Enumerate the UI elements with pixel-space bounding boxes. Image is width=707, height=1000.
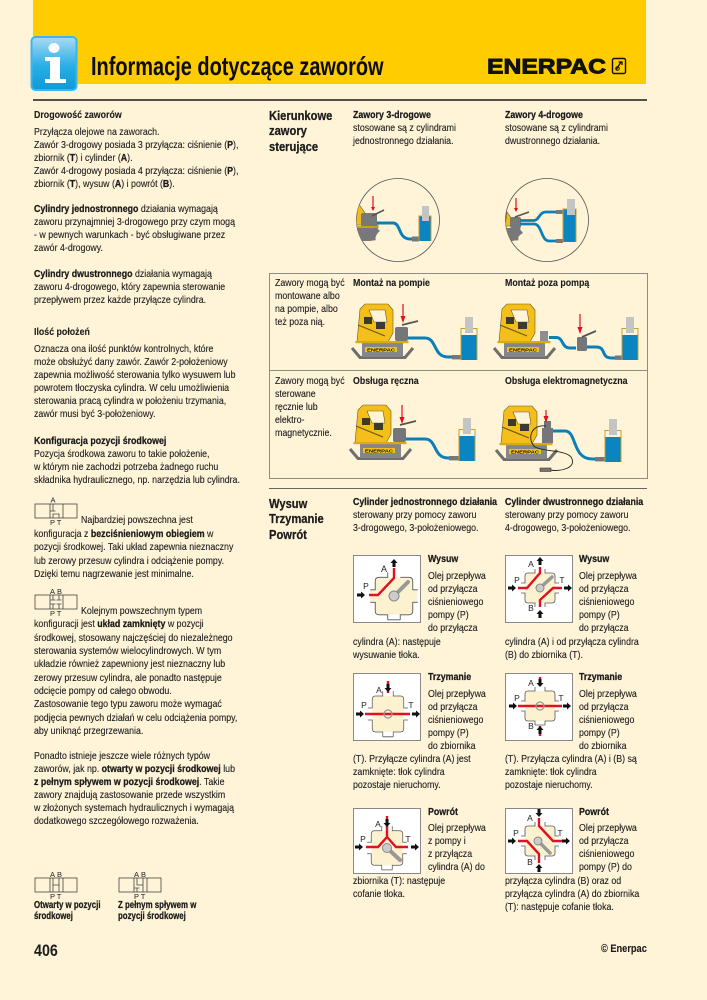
panel divider (269, 370, 647, 371)
left column text: ports (34, 126, 238, 190)
left column text: positions heading: Ilość położeń (34, 326, 90, 338)
text: 4-way valves (505, 109, 608, 147)
diagram: 3-way hold: T (408, 700, 414, 710)
text: 3-way retract continuation: zbiornika (T): następuje (353, 875, 445, 887)
left column text: closed center: Zastosowanie tego typu zaworu może wymagać (34, 698, 222, 710)
text: 4-way retract continuation: przyłącza cylindra (B) oraz od (505, 875, 621, 887)
text: 4-way retract body: Olej przepływa (579, 822, 637, 834)
text: 3-way valves: Zawory 3-drogowe (353, 109, 431, 121)
text: 4-way extend body: ciśnieniowego (579, 596, 634, 608)
text: 3-way hold body: Olej przepływa (428, 688, 486, 700)
heading: solenoid operation: Obsługa elektromagnetyczna (505, 375, 628, 387)
diagram: 4-way hold: B (528, 721, 534, 731)
text: 4-way extend continuation: cylindra (A) i od przyłącza cylindra (505, 636, 639, 648)
text: operation note: sterowane (275, 388, 316, 400)
symbol: float center: P (134, 892, 139, 901)
text: 3-way extend body: pompy (P) (428, 609, 469, 621)
left column text: single-acting cylinders: Cylindry jednostronnego działania wymagają (34, 203, 218, 215)
text: 3-way hold body (428, 688, 486, 752)
left column text: closed center: aby uniknąć przegrzewania. (34, 725, 143, 737)
text: 3-way extend body: od przyłącza (428, 583, 478, 595)
text: 3-way hold continuation (353, 753, 471, 791)
symbol: float center: B (141, 870, 146, 879)
text: operation note: magnetycznie. (275, 427, 332, 439)
diagram: 4-way hold: P (514, 693, 520, 703)
section rule (269, 488, 647, 489)
text: operation note (275, 375, 345, 439)
left column text: double-acting cylinders: zaworu 4-drogowego, który zapewnia sterowanie (34, 281, 225, 293)
text: 4-way extend body: od przyłącza (579, 583, 629, 595)
left column text: other valves: zaworów, jak np. otwarty w pozycji środkowej lub (34, 763, 235, 775)
diagram: 4-way extend: B (528, 603, 534, 613)
left column text: closed center: odcięcie pompy od całego obwodu. (34, 685, 172, 697)
heading: manual operation: Obsługa ręczna (353, 375, 419, 387)
symbol: tandem center: T (57, 518, 62, 527)
caption: open center: środkowej (34, 910, 73, 922)
text: single-acting cylinder: 3-drogowego, 3-położeniowego. (353, 522, 479, 534)
text: 3-way hold body: do zbiornika (428, 740, 476, 752)
symbol: closed center: T (57, 609, 62, 618)
caption: float center (118, 898, 196, 922)
logo: Enerpac: ENERPAC (487, 54, 606, 78)
text: double-acting cylinder: sterowany przy pomocy zaworu (505, 509, 629, 521)
text: 3-way retract: Powrót (428, 806, 458, 818)
diagram: 4-way extend: T (559, 575, 565, 585)
illustration: pump mounted valve: ENERPAC (367, 347, 396, 352)
text: 4-way extend body: pompy (P) (579, 609, 620, 621)
heading: extend hold retract (268, 496, 324, 542)
illustration: pump mounted valve (352, 304, 477, 360)
text: 4-way retract body: ciśnieniowego (579, 848, 634, 860)
illustration: solenoid valve (496, 406, 621, 472)
diagram: 4-way hold: A (528, 678, 534, 688)
left column text: closed center: podjęcia pewnych działań w celu odciążenia pompy, (34, 712, 237, 724)
text: 4-way hold body: do zbiornika (579, 740, 627, 752)
left column text: other valves: z pełnym spływem w pozycji środkowej. Takie (34, 776, 225, 788)
left column text: center configuration (34, 435, 240, 486)
left column text: tandem center (34, 514, 234, 580)
text: operation note: Zawory mogą być (275, 375, 345, 387)
left column text: other valves: zawory znajdują zastosowanie przede wszystkim (34, 789, 225, 801)
diagram: 3-way hold (354, 674, 420, 740)
text: 3-way extend body (428, 570, 486, 634)
text: single-acting cylinder: Cylinder jednostronnego działania (353, 496, 497, 508)
text: 3-way valves (352, 109, 456, 147)
text: 3-way extend continuation: cylindra (A): następuje (353, 636, 441, 648)
text: operation note: ręcznie lub (275, 401, 318, 413)
left column text: tandem center: lub zerowy przesuw cylindra i odciążenie pompy. (34, 554, 224, 566)
text: 3-way extend: Wysuw (428, 553, 458, 565)
left column text: center configuration: Pozycja środkowa zaworu to takie położenie, (34, 448, 210, 460)
header band (33, 0, 646, 84)
text: 4-way valves: stosowane są z cylindrami (505, 122, 608, 134)
left column text: double-acting cylinders: Cylindry dwustronnego działania wymagają (34, 268, 212, 280)
text: 4-way extend: Wysuw (579, 553, 609, 565)
left column text: center configuration: w którym nie zachodzi potrzeba żadnego ruchu (34, 461, 218, 473)
text: 3-way retract body (428, 822, 486, 873)
text: 4-way hold continuation: pozostaje nieruchomy. (505, 779, 593, 791)
text: 4-way hold continuation: (T). Przyłącza cylindra (A) i (B) są (505, 753, 637, 765)
left column text: positions: zapewnia możliwość sterowania tylko wysuwem lub (34, 369, 235, 381)
diagram: 4-way retract: P (513, 828, 519, 838)
heading: extend hold retract: Powrót (269, 527, 307, 542)
text: 3-way hold body: pompy (P) (428, 727, 469, 739)
text: 4-way hold: Trzymanie (579, 671, 622, 683)
left column text: closed center: Kolejnym powszechnym typem (81, 605, 202, 617)
left column text: single-acting cylinders: zawór 4-drogowy. (34, 242, 103, 254)
diagram: 4-way retract: T (557, 828, 563, 838)
text: mounting note: też poza nią. (275, 316, 325, 328)
text: 3-way retract body: Olej przepływa (428, 822, 486, 834)
left column text: ports: Zawór 4-drogowy posiada 4 przyłącza: ciśnienie (P), (34, 165, 238, 177)
left column text: ports: zbiornik (T) i cylinder (A). (34, 152, 133, 164)
text: 3-way hold: Trzymanie (428, 671, 471, 683)
text: 4-way hold body: pompy (P) (579, 727, 620, 739)
diagram: 4-way extend (506, 556, 572, 622)
diagram: 3-way hold: A (376, 685, 382, 695)
text: 3-way hold continuation: (T). Przyłącze cylindra (A) jest (353, 753, 471, 765)
text: 3-way extend body: ciśnieniowego (428, 596, 483, 608)
illustration: 4-way valve detail (505, 178, 588, 262)
illustration: solenoid valve: ENERPAC (511, 449, 540, 454)
symbol: open center (35, 870, 77, 901)
left column text: center configuration: składnika hydraulicznego, np. narzędzia lub cylindra. (34, 474, 240, 486)
left column text: tandem center: Dzięki temu nagrzewanie jest minimalne. (34, 568, 194, 580)
text: double-acting cylinder: 4-drogowego, 3-położeniowego. (505, 522, 631, 534)
symbol: open center: T (57, 892, 62, 901)
page number: 406 (34, 941, 58, 960)
symbol: tandem center: A (50, 496, 56, 504)
left column text: ports: Zawór 3-drogowy posiada 3 przyłącza: ciśnienie (P), (34, 139, 238, 151)
caption: open center (34, 898, 101, 922)
text: mounting note: na pompie, albo (275, 303, 338, 315)
symbol: closed center: P (50, 609, 55, 618)
diagram: 3-way extend: P (363, 581, 369, 591)
illustration: manual valve (350, 405, 475, 461)
text: operation note: elektro- (275, 414, 304, 426)
heading: directional valves: Kierunkowe (269, 108, 332, 123)
symbol: tandem center (35, 496, 77, 527)
text: single-acting cylinder (353, 496, 498, 534)
text: mounting note: Zawory mogą być (275, 277, 345, 289)
left column text: flow capacity heading: Drogowość zaworów (34, 109, 122, 121)
caption: open center: Otwarty w pozycji (34, 898, 101, 910)
left column text: positions: Oznacza ona ilość punktów kontrolnych, które (34, 343, 213, 355)
header rule (33, 99, 647, 101)
symbol: closed center: B (57, 587, 62, 596)
text: 4-way extend continuation (505, 636, 639, 661)
left column text: closed center: sterowania systemów wielocylindrowych. W tym (34, 645, 221, 657)
left column text: ports: zbiornik (T), wysuw (A) i powrót (B). (34, 178, 175, 190)
left column text: other valves: Ponadto istnieje jeszcze wiele różnych typów (34, 750, 210, 762)
text: 4-way retract body: pompy (P) do (579, 861, 632, 873)
left column text: positions: może obsłużyć dany zawór. Zawór 2-położeniowy (34, 356, 228, 368)
heading: extend hold retract: Trzymanie (269, 511, 324, 526)
diagram: 4-way retract: A (527, 813, 533, 823)
text: single-acting cylinder: sterowany przy pomocy zaworu (353, 509, 477, 521)
symbol: float center: A (134, 870, 139, 879)
left column text: positions: sterowania pracą cylindra w położeniu trzymania, (34, 395, 226, 407)
left column text: closed center: konfiguracji jest układ zamknięty w pozycji (34, 618, 204, 630)
text: 3-way retract continuation (353, 875, 445, 900)
heading: directional valves: zawory (269, 123, 307, 138)
text: 4-way extend body: do przyłącza (579, 622, 629, 634)
left column text: double-acting cylinders (34, 268, 225, 306)
text: mounting note (275, 277, 345, 328)
diagram: 4-way hold (506, 674, 572, 740)
caption: float center: pozycji środkowej (118, 910, 186, 922)
text: 4-way retract body (579, 822, 637, 873)
heading: directional valves: sterujące (269, 139, 318, 154)
diagram: 3-way extend (354, 556, 420, 622)
diagram: 4-way extend: P (514, 575, 520, 585)
text: 4-way hold body (579, 688, 637, 752)
text: 3-way extend body: Olej przepływa (428, 570, 486, 582)
left column text: single-acting cylinders: zaworu przynajmniej 3-drogowego przy czym mogą (34, 216, 235, 228)
text: 3-way extend continuation (352, 636, 441, 661)
illustration: manual valve: ENERPAC (365, 448, 394, 453)
text: 4-way hold continuation: zamknięte: tłok cylindra (505, 766, 597, 778)
left column text: closed center: zerowy przesuw cylindra, ale ponadto następuje (34, 672, 222, 684)
symbol: tandem center: P (50, 518, 55, 527)
diagram: 3-way retract (354, 808, 420, 874)
illustration: remote mounted valve: ENERPAC (509, 347, 538, 352)
symbol: closed center (35, 587, 77, 618)
text: 3-way extend continuation: wysuwanie tłoka. (353, 649, 420, 661)
copyright: © Enerpac (601, 943, 647, 955)
panel: mounting and operation (269, 273, 648, 479)
diagram: 4-way hold: T (558, 693, 564, 703)
text: 3-way retract body: cylindra (A) do (428, 861, 485, 873)
text: 4-way retract continuation: przyłącza cylindra (A) do zbiornika (505, 888, 639, 900)
text: 4-way valves: dwustronnego działania. (505, 135, 600, 147)
diagram: 3-way hold: P (361, 700, 367, 710)
left column text: other valves: dodatkowego szczegółowego rozważenia. (34, 815, 199, 827)
left column text: single-acting cylinders (34, 203, 236, 254)
text: 4-way retract body: od przyłącza (579, 835, 629, 847)
text: 3-way retract body: z przyłącza (428, 848, 472, 860)
text: 3-way hold continuation: pozostaje nieruchomy. (353, 779, 441, 791)
symbol: open center: P (50, 892, 55, 901)
heading: pump mounting: Montaż na pompie (353, 277, 430, 289)
left column text: single-acting cylinders: - w pewnych warunkach - być obsługiwane przez (34, 229, 225, 241)
text: 4-way hold continuation (505, 753, 637, 791)
text: 4-way hold body: ciśnieniowego (579, 714, 634, 726)
diagram: 4-way extend: A (528, 559, 534, 569)
diagram: 3-way retract: P (360, 834, 366, 844)
left column text: closed center: układzie również zapewniony jest nieznaczny lub (34, 658, 225, 670)
left column text: tandem center: konfiguracja z bezciśnieniowym obiegiem w (34, 528, 213, 540)
diagram: 3-way retract: T (405, 834, 411, 844)
left column text: other valves: w złożonych systemach hydraulicznych i wymagają (34, 802, 234, 814)
left column text: closed center: środkowej, stosowany najczęściej do niezależnego (34, 632, 233, 644)
text: 3-way hold body: ciśnieniowego (428, 714, 483, 726)
text: 3-way valves: stosowane są z cylindrami (353, 122, 456, 134)
left column text: center configuration: Konfiguracja pozycji środkowej (34, 435, 166, 447)
text: 4-way retract continuation (505, 875, 640, 913)
text: 3-way valves: jednostronnego działania. (353, 135, 454, 147)
symbol: closed center: A (50, 587, 55, 596)
text: 4-way retract: Powrót (579, 806, 609, 818)
left column text: ports: Przyłącza olejowe na zaworach. (34, 126, 160, 138)
text: 4-way extend body (579, 570, 637, 634)
symbol: open center: B (57, 870, 62, 879)
left column text: double-acting cylinders: przepływem przez każde przyłącze cylindra. (34, 294, 206, 306)
title: Informacje dotyczące zaworów (91, 51, 384, 81)
text: 3-way hold continuation: zamknięte: tłok cylindra (353, 766, 445, 778)
left column text: other valves (34, 750, 235, 827)
diagram: 3-way retract: A (375, 819, 381, 829)
text: 4-way hold body: od przyłącza (579, 701, 629, 713)
illustration: remote mounted valve (494, 304, 638, 360)
heading: extend hold retract: Wysuw (269, 496, 307, 511)
symbol: float center: T (141, 892, 146, 901)
left column text: tandem center: pozycji środkowej. Taki układ zapewnia nieznaczny (34, 541, 233, 553)
text: 3-way extend body: do przyłącza (428, 622, 478, 634)
text: 4-way valves: Zawory 4-drogowe (505, 109, 583, 121)
text: 4-way extend continuation: (B) do zbiornika (T). (505, 649, 583, 661)
symbol: open center: A (50, 870, 55, 879)
text: double-acting cylinder: Cylinder dwustronnego działania (505, 496, 643, 508)
heading: remote mounting: Montaż poza pompą (505, 277, 589, 289)
illustration: 3-way valve detail (356, 178, 440, 262)
left column text: closed center (34, 605, 237, 737)
text: 4-way hold body: Olej przepływa (579, 688, 637, 700)
left column text: positions: powrotem tłoczyska cylindra. W celu umożliwienia (34, 382, 229, 394)
left column text: tandem center: Najbardziej powszechna jest (81, 514, 193, 526)
left column text: positions (34, 343, 236, 420)
diagram: 4-way retract (506, 808, 572, 874)
left column text: positions: zawór musi być 3-położeniowy. (34, 408, 155, 420)
text: double-acting cylinder (505, 496, 644, 534)
text: mounting note: montowane albo (275, 290, 340, 302)
text: 3-way hold body: od przyłącza (428, 701, 478, 713)
heading: directional valves (269, 108, 332, 154)
text: 4-way extend body: Olej przepływa (579, 570, 637, 582)
hydraulic illustrations (356, 178, 589, 262)
diagram: 3-way extend: A (381, 564, 387, 574)
text: 3-way retract body: z pompy i (428, 835, 466, 847)
text: 3-way retract continuation: cofanie tłoka. (353, 888, 405, 900)
caption: float center: Z pełnym spływem w (118, 898, 196, 910)
text: 4-way retract continuation: (T): następuje cofanie tłoka. (505, 901, 614, 913)
diagram: 4-way retract: B (527, 857, 533, 867)
symbol: float center (119, 870, 161, 901)
